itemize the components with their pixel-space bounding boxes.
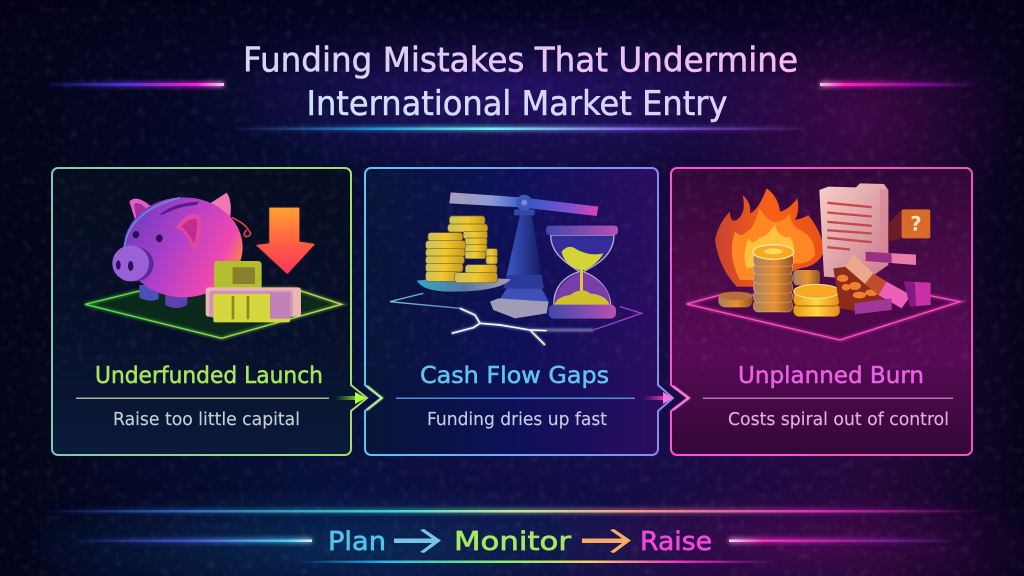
- panel: unplanned burn: [671, 168, 972, 455]
- title: [243, 40, 798, 123]
- invoice document: [819, 183, 888, 280]
- footer bottom rainbow line: [294, 560, 774, 563]
- arrow: pink connector: [643, 386, 689, 410]
- panel: underfunded launch: [52, 168, 367, 455]
- down arrow: [256, 208, 315, 274]
- arrow: plan to monitor: [394, 529, 441, 553]
- title: International Market Entry: [306, 84, 728, 123]
- title left light line: [44, 82, 224, 87]
- title: Funding Mistakes That Undermine: [243, 40, 798, 80]
- subtext: Costs spiral out of control: [728, 409, 949, 430]
- footer process: plan: Plan: [328, 527, 386, 557]
- cracked platform: [390, 293, 642, 345]
- heading: Cash Flow Gaps: [420, 363, 609, 389]
- divider: [76, 398, 329, 399]
- icon: piggy bank with down arrow and cash: [85, 193, 342, 338]
- footer right light line: [729, 538, 960, 543]
- title right light line: [820, 82, 980, 87]
- icon: scale with coins and hourglass: [390, 192, 642, 345]
- coin stacks: [426, 216, 497, 283]
- divider: [396, 398, 635, 399]
- title underline: [235, 126, 805, 130]
- subtext: Raise too little capital: [113, 409, 300, 430]
- subtext: Funding dries up fast: [427, 409, 607, 430]
- heading: Underfunded Launch: [95, 363, 323, 389]
- footer top rainbow line: [40, 509, 985, 513]
- rubble bars: [833, 252, 931, 314]
- cash bundles: [206, 261, 301, 322]
- footer left light line: [70, 538, 312, 543]
- footer process: raise: Raise: [640, 527, 712, 557]
- icon: flames, coins and invoice: [687, 183, 960, 340]
- arrow: monitor to raise: [582, 529, 631, 553]
- question mark box: ?: [910, 213, 922, 236]
- divider: [703, 398, 953, 399]
- panel: cash flow gaps: [365, 168, 673, 455]
- pig: [112, 193, 250, 308]
- footer process: monitor: Monitor: [454, 527, 571, 557]
- platform: [85, 288, 342, 338]
- coin stacks: [718, 245, 840, 317]
- scale: [417, 192, 598, 318]
- flames: [715, 188, 823, 287]
- heading: Unplanned Burn: [738, 363, 924, 389]
- platform: [687, 295, 960, 340]
- arrow: green connector: [335, 386, 382, 410]
- question mark box: [888, 209, 930, 242]
- hourglass: [546, 226, 618, 319]
